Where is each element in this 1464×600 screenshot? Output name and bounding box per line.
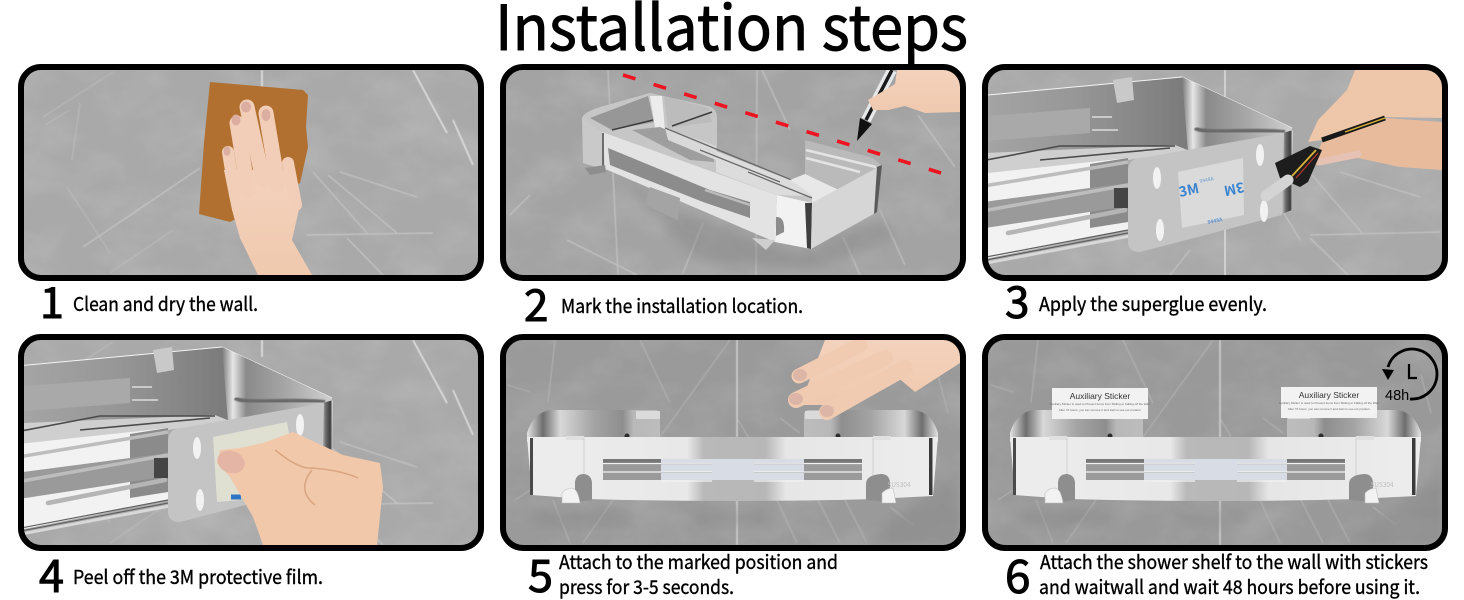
caption: step 5: Attach to the marked position and bbox=[559, 548, 838, 575]
3M adhesive pad: 9448A bbox=[1207, 216, 1224, 226]
caption: step 3: 3 bbox=[1005, 267, 1029, 331]
3M adhesive pad: 3M bbox=[1222, 177, 1246, 201]
panel: step 5 press shelf bbox=[503, 337, 963, 548]
peeled protective film bbox=[213, 422, 290, 502]
caption: step 1 bbox=[40, 269, 258, 331]
panel border bbox=[985, 67, 1445, 278]
marble wall background bbox=[506, 340, 960, 545]
auxiliary sticker right: After 72 hours, you can remove it and start to use our product. bbox=[1288, 407, 1370, 411]
icon: hand pressing shelf bbox=[789, 340, 960, 417]
caption: step 5: press for 3-5 seconds. bbox=[559, 573, 734, 600]
3M adhesive pad bbox=[1177, 158, 1246, 228]
panel: step 1 clean wall bbox=[21, 67, 481, 278]
auxiliary sticker left: Auxiliary Sticker bbox=[1070, 391, 1130, 401]
icon: hand peeling film bbox=[214, 432, 383, 545]
caption: step 2 bbox=[524, 270, 803, 334]
caption: step 3: Apply the superglue evenly. bbox=[1039, 290, 1267, 317]
shelf bracket with mounting plate bbox=[0, 347, 333, 538]
caption: step 4: Peel off the 3M protective film. bbox=[73, 563, 323, 590]
3M adhesive pad: 9448A bbox=[1199, 175, 1215, 185]
auxiliary sticker left: After 72 hours, you can remove it and start to use our product. bbox=[1059, 408, 1141, 412]
auxiliary sticker right: Auxiliary Sticker bbox=[1299, 390, 1359, 400]
icon: hand wiping wall bbox=[224, 102, 312, 275]
auxiliary sticker right: Auxiliary Sticker is used to Prevent Items from Sliding or Falling off the Wall. bbox=[1279, 401, 1380, 405]
caption: step 4 bbox=[39, 540, 323, 600]
caption: step 2: Mark the installation location. bbox=[561, 292, 803, 319]
marble wall background bbox=[24, 70, 478, 275]
panel: step 4 peel film bbox=[0, 337, 481, 548]
panel border bbox=[985, 337, 1445, 548]
icon: hand holding marker bbox=[868, 70, 960, 113]
icon: orange cleaning cloth bbox=[199, 82, 308, 222]
shelf bracket with mounting plate bbox=[988, 76, 1293, 264]
caption: step 5 bbox=[528, 540, 838, 600]
panel border bbox=[503, 337, 963, 548]
marble wall background bbox=[506, 70, 960, 275]
icon: 48h clock bbox=[1382, 349, 1437, 404]
shower shelf bbox=[527, 410, 938, 524]
shelf shadow bbox=[638, 192, 892, 270]
marble wall background bbox=[988, 70, 1442, 275]
shower shelf bbox=[582, 93, 882, 250]
marble wall background bbox=[988, 340, 1442, 545]
caption: step 3 bbox=[1005, 267, 1267, 331]
auxiliary sticker right bbox=[1279, 387, 1380, 418]
icon: fingers holding glue bottle bbox=[1266, 70, 1442, 196]
red dashed guide line bbox=[623, 75, 941, 173]
panel border bbox=[21, 337, 481, 548]
auxiliary sticker left bbox=[1050, 388, 1151, 419]
caption: step 1: Clean and dry the wall. bbox=[73, 290, 258, 317]
caption: step 2: 2 bbox=[524, 270, 548, 334]
caption: step 6 bbox=[1005, 541, 1428, 600]
panel: step 6 wait 48 hours bbox=[985, 337, 1445, 548]
caption: step 1: 1 bbox=[40, 269, 64, 331]
caption: step 6: and waitwall and wait 48 hours before using it. bbox=[1039, 573, 1420, 600]
3M adhesive pad: 3M bbox=[1177, 178, 1201, 202]
panel: step 3 apply glue bbox=[960, 67, 1445, 278]
icon: marker pen bbox=[857, 70, 892, 141]
marble wall background bbox=[24, 340, 478, 545]
auxiliary sticker left: Auxiliary Sticker is used to Prevent Items from Sliding or Falling off the Wall. bbox=[1050, 402, 1151, 406]
panel: step 2 mark location bbox=[503, 67, 963, 278]
panel border bbox=[21, 67, 481, 278]
icon: 48h clock: 48h bbox=[1385, 388, 1409, 404]
panel border bbox=[503, 67, 963, 278]
shower shelf bbox=[1010, 410, 1421, 524]
caption: step 6: Attach the shower shelf to the wall with stickers bbox=[1040, 548, 1428, 575]
